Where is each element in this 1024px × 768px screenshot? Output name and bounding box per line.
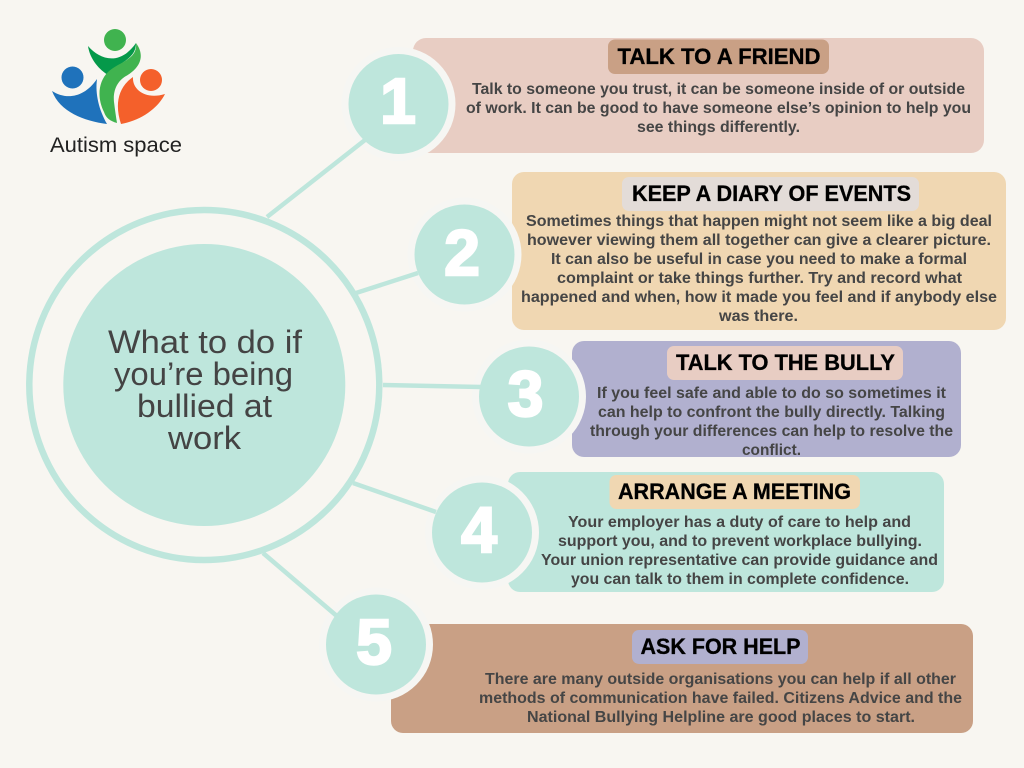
text 2: however viewing them all together can give a clearer picture. bbox=[527, 232, 991, 249]
panel 5: ask for help bbox=[319, 588, 973, 733]
text 2 bbox=[521, 213, 997, 325]
text 5 bbox=[479, 671, 962, 726]
connector lines bbox=[263, 140, 481, 617]
panel 2: keep a diary bbox=[408, 172, 1006, 330]
icon: orange figure bbox=[118, 69, 165, 124]
text 4: support you, and to prevent workplace bullying. bbox=[558, 533, 922, 550]
label 5: ASK FOR HELP bbox=[640, 634, 800, 659]
number badge 4 bbox=[425, 476, 539, 590]
number badge 4: 4 bbox=[461, 494, 497, 566]
label 1 bbox=[608, 40, 829, 74]
label 1: TALK TO A FRIEND bbox=[618, 44, 820, 69]
text 5: methods of communication have failed. Citizens Advice and the bbox=[479, 690, 962, 707]
text 1 bbox=[466, 81, 971, 136]
text 2: Sometimes things that happen might not seem like a big deal bbox=[526, 213, 992, 230]
central hub bbox=[29, 210, 379, 560]
panel 1: talk to a friend bbox=[342, 38, 984, 161]
text 1: Talk to someone you trust, it can be someone inside of or outside bbox=[472, 81, 965, 98]
icon: green figure bbox=[88, 29, 141, 123]
label 4: ARRANGE A MEETING bbox=[618, 479, 851, 504]
hub title: you’re being bbox=[114, 356, 293, 392]
number badge 2: 2 bbox=[444, 217, 480, 289]
text 1: of work. It can be good to have someone else’s opinion to help you bbox=[466, 100, 971, 117]
text 3: conflict. bbox=[742, 442, 801, 459]
logo wordmark: Autism space bbox=[50, 134, 182, 157]
text 2: complaint or take things further. Try and record what bbox=[557, 270, 963, 287]
panel 3: talk to the bully bbox=[472, 340, 961, 459]
text 2: It can also be useful in case you need to make a formal bbox=[551, 251, 967, 268]
number badge 3 bbox=[472, 340, 586, 454]
logo bbox=[50, 29, 182, 157]
text 4: you can talk to them in complete confidence. bbox=[571, 571, 909, 588]
text 4: Your union representative can provide guidance and bbox=[541, 552, 938, 569]
text 5: National Bullying Helpline are good places to start. bbox=[527, 709, 915, 726]
text 5: There are many outside organisations you can help if all other bbox=[485, 671, 956, 688]
number badge 5: 5 bbox=[356, 606, 392, 678]
hub title bbox=[108, 324, 302, 456]
text 4 bbox=[541, 514, 938, 588]
icon: blue figure bbox=[52, 66, 107, 124]
hub title: What to do if bbox=[108, 324, 302, 360]
number badge 2 bbox=[408, 198, 522, 312]
text 3: through your differences can help to resolve the bbox=[590, 423, 953, 440]
hub title: work bbox=[167, 420, 242, 456]
panel 4: arrange a meeting bbox=[425, 472, 944, 592]
label 5 bbox=[632, 630, 808, 664]
label 3: TALK TO THE BULLY bbox=[676, 350, 895, 375]
label 3 bbox=[667, 346, 903, 380]
text 2: happened and when, how it made you feel and if anybody else bbox=[521, 289, 997, 306]
label 2: KEEP A DIARY OF EVENTS bbox=[632, 181, 911, 206]
text 4: Your employer has a duty of care to help and bbox=[568, 514, 911, 531]
number badge 5 bbox=[319, 588, 433, 702]
label 4 bbox=[610, 475, 860, 509]
number badge 1 bbox=[342, 47, 456, 161]
text 2: was there. bbox=[718, 308, 798, 325]
number badge 3: 3 bbox=[508, 358, 543, 430]
text 3 bbox=[590, 385, 953, 459]
text 3: If you feel safe and able to do so sometimes it bbox=[597, 385, 947, 402]
hub title: bullied at bbox=[137, 388, 272, 424]
text 1: see things differently. bbox=[637, 119, 800, 136]
number badge 1: 1 bbox=[380, 65, 416, 137]
text 3: can help to confront the bully directly. Talking bbox=[598, 404, 945, 421]
